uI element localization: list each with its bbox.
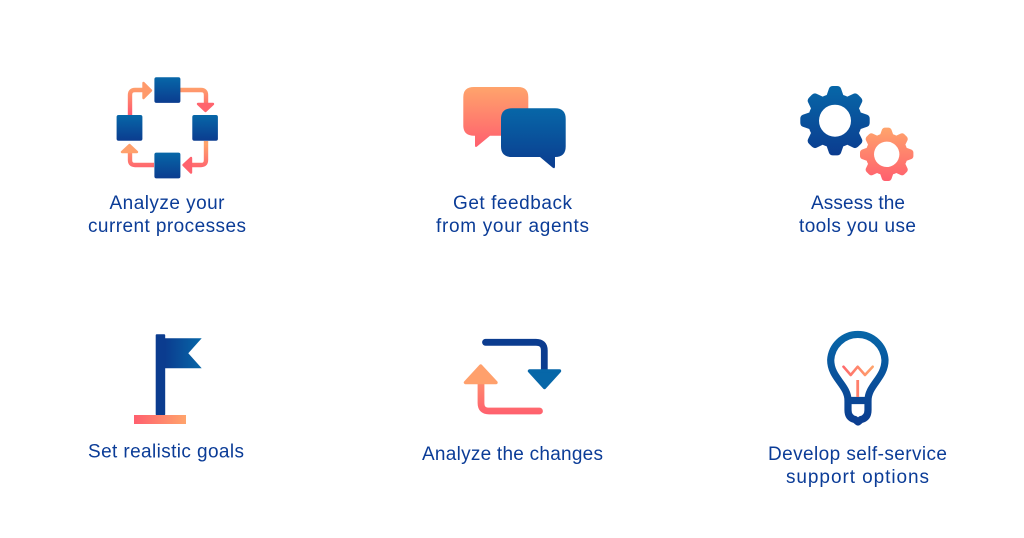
label: develop self-service support options: support options — [786, 467, 929, 488]
label: analyze your current processes: current processes — [88, 216, 246, 237]
infographic canvas — [88, 77, 946, 487]
panel: set realistic goals — [88, 334, 244, 462]
icon: flag — [134, 334, 202, 424]
label: get feedback from your agents: Get feedback — [453, 193, 572, 214]
icon: small gear — [860, 128, 914, 181]
panel: develop self-service support options — [768, 334, 947, 488]
label: get feedback from your agents: from your agents — [436, 216, 589, 237]
icon: gears — [798, 84, 916, 183]
label: analyze your current processes: Analyze your — [110, 193, 225, 214]
label: assess the tools you use: tools you use — [799, 216, 916, 237]
label: set realistic goals: Set realistic goals — [88, 442, 244, 462]
icon: speech bubbles — [463, 87, 566, 168]
label: develop self-service support options: Develop self-service — [768, 444, 947, 465]
label: analyze the changes: Analyze the changes — [422, 444, 603, 465]
panel: analyze your current processes — [88, 77, 246, 237]
panel: assess the tools you use — [798, 84, 916, 237]
icon: swap arrows — [466, 342, 560, 411]
icon: light bulb — [831, 334, 885, 422]
panel: analyze the changes — [422, 342, 603, 465]
label: assess the tools you use: Assess the — [811, 193, 905, 214]
icon: process loop — [117, 77, 218, 178]
icon: large gear — [800, 86, 870, 156]
panel: get feedback from your agents — [436, 87, 589, 237]
